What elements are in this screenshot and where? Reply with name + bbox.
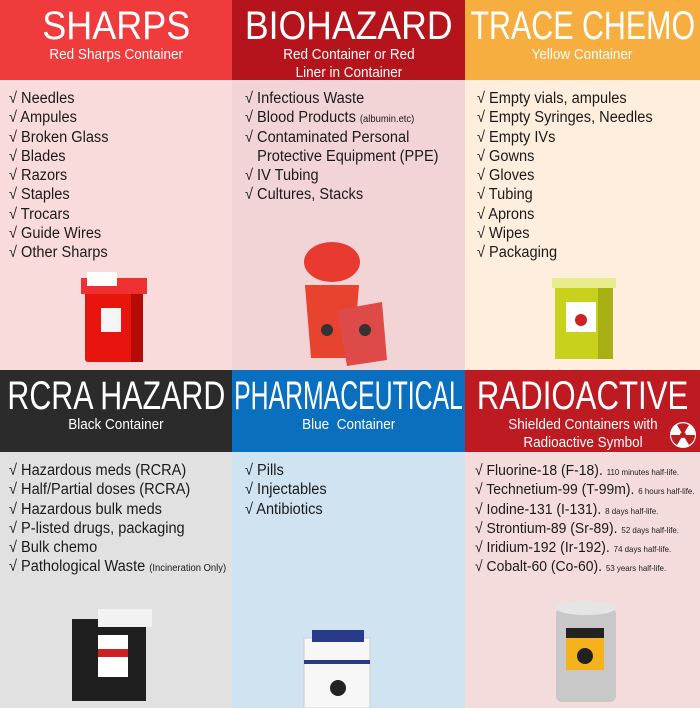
panel: pharmaceutical: [232, 370, 465, 708]
panel: radioactive: [465, 370, 700, 708]
header: trace chemo: Yellow Container: [532, 46, 633, 63]
list: radioactive: √ Strontium-89 (Sr-89). 52 days half-life.: [475, 520, 679, 537]
header: pharmaceutical: [232, 370, 465, 452]
list: sharps: √ Ampules: [9, 109, 77, 126]
list: trace chemo: √ Aprons: [477, 206, 534, 223]
header: sharps: [0, 0, 232, 80]
panel: sharps: [0, 0, 232, 370]
list: sharps: √ Trocars: [9, 206, 70, 223]
header: biohazard: BIOHAZARD: [245, 4, 452, 48]
list: pharmaceutical: [245, 462, 327, 518]
list: rcra: √ Half/Partial doses (RCRA): [9, 481, 190, 498]
header: sharps: Red Sharps Container: [49, 46, 183, 63]
icon: red sharps container: [81, 272, 147, 362]
list: sharps: √ Staples: [9, 186, 70, 203]
list: biohazard: [245, 90, 439, 203]
list: rcra: √ Hazardous meds (RCRA): [9, 462, 186, 479]
list: rcra: √ P-listed drugs, packaging: [9, 520, 185, 537]
header: trace chemo: [465, 0, 700, 80]
header: biohazard: [232, 0, 465, 80]
icon: black container: [72, 609, 152, 701]
header: rcra: RCRA HAZARD: [7, 374, 225, 418]
list: trace chemo: √ Gowns: [477, 148, 534, 165]
list: trace chemo: √ Empty vials, ampules: [477, 90, 627, 107]
panel: biohazard: [232, 0, 465, 370]
icon: radioactive symbol: [670, 422, 696, 448]
list: trace chemo: √ Tubing: [477, 186, 533, 203]
list: radioactive: √ Fluorine-18 (F-18). 110 minutes half-life.: [475, 462, 679, 479]
list: trace chemo: √ Wipes: [477, 225, 530, 242]
list: radioactive: √ Technetium-99 (T-99m). 6 hours half-life.: [475, 481, 694, 498]
list: pharmaceutical: √ Antibiotics: [245, 501, 323, 518]
list: radioactive: √ Iodine-131 (I-131). 8 days half-life.: [475, 501, 658, 518]
list: sharps: [9, 90, 109, 261]
list: biohazard: √ Contaminated Personal: [245, 129, 409, 146]
icon: yellow chemo container: [552, 278, 616, 359]
list: rcra: √ Hazardous bulk meds: [9, 501, 162, 518]
header: pharmaceutical: Blue Container: [302, 416, 395, 433]
list: sharps: √ Blades: [9, 148, 66, 165]
header: radioactive: [465, 370, 700, 452]
icon: caution canister: [556, 601, 616, 702]
panel: rcra hazard: [0, 370, 232, 708]
list: sharps: √ Broken Glass: [9, 129, 109, 146]
list: sharps: √ Needles: [9, 90, 75, 107]
list: trace chemo: [477, 90, 653, 261]
list: trace chemo: √ Empty Syringes, Needles: [477, 109, 653, 126]
list: rcra: [9, 462, 226, 575]
list: biohazard: Protective Equipment (PPE): [257, 148, 439, 165]
header: rcra: [0, 370, 232, 452]
header: trace chemo: TRACE CHEMO: [470, 4, 695, 48]
list: rcra: √ Bulk chemo: [9, 539, 97, 556]
list: radioactive: √ Iridium-192 (Ir-192). 74 days half-life.: [475, 539, 671, 556]
list: trace chemo: √ Gloves: [477, 167, 534, 184]
header: sharps: SHARPS: [42, 4, 190, 48]
list: sharps: √ Other Sharps: [9, 244, 108, 261]
list: pharmaceutical: √ Pills: [245, 462, 284, 479]
list: sharps: √ Razors: [9, 167, 67, 184]
list: biohazard: √ IV Tubing: [245, 167, 319, 184]
header: rcra: Black Container: [68, 416, 164, 433]
list: trace chemo: √ Packaging: [477, 244, 557, 261]
header: pharmaceutical: PHARMACEUTICAL: [234, 374, 463, 418]
header: radioactive: RADIOACTIVE: [477, 374, 688, 418]
header: radioactive: Shielded Containers with: [508, 416, 657, 433]
list: biohazard: √ Infectious Waste: [245, 90, 364, 107]
list: radioactive: √ Cobalt-60 (Co-60). 53 years half-life.: [475, 558, 666, 575]
list: biohazard: √ Cultures, Stacks: [245, 186, 363, 203]
icon: blue pharma container: [304, 630, 370, 708]
icon: red biohazard bin and bag: [304, 242, 387, 366]
list: biohazard: √ Blood Products (albumin.etc): [245, 109, 414, 126]
list: radioactive: [475, 462, 694, 575]
list: rcra: √ Pathological Waste (Incineration Only): [9, 558, 226, 575]
panel: trace chemo: [465, 0, 700, 370]
list: trace chemo: √ Empty IVs: [477, 129, 555, 146]
list: pharmaceutical: √ Injectables: [245, 481, 327, 498]
header: biohazard: Red Container or Red: [283, 46, 414, 63]
header: radioactive: Radioactive Symbol: [523, 434, 642, 451]
list: sharps: √ Guide Wires: [9, 225, 101, 242]
